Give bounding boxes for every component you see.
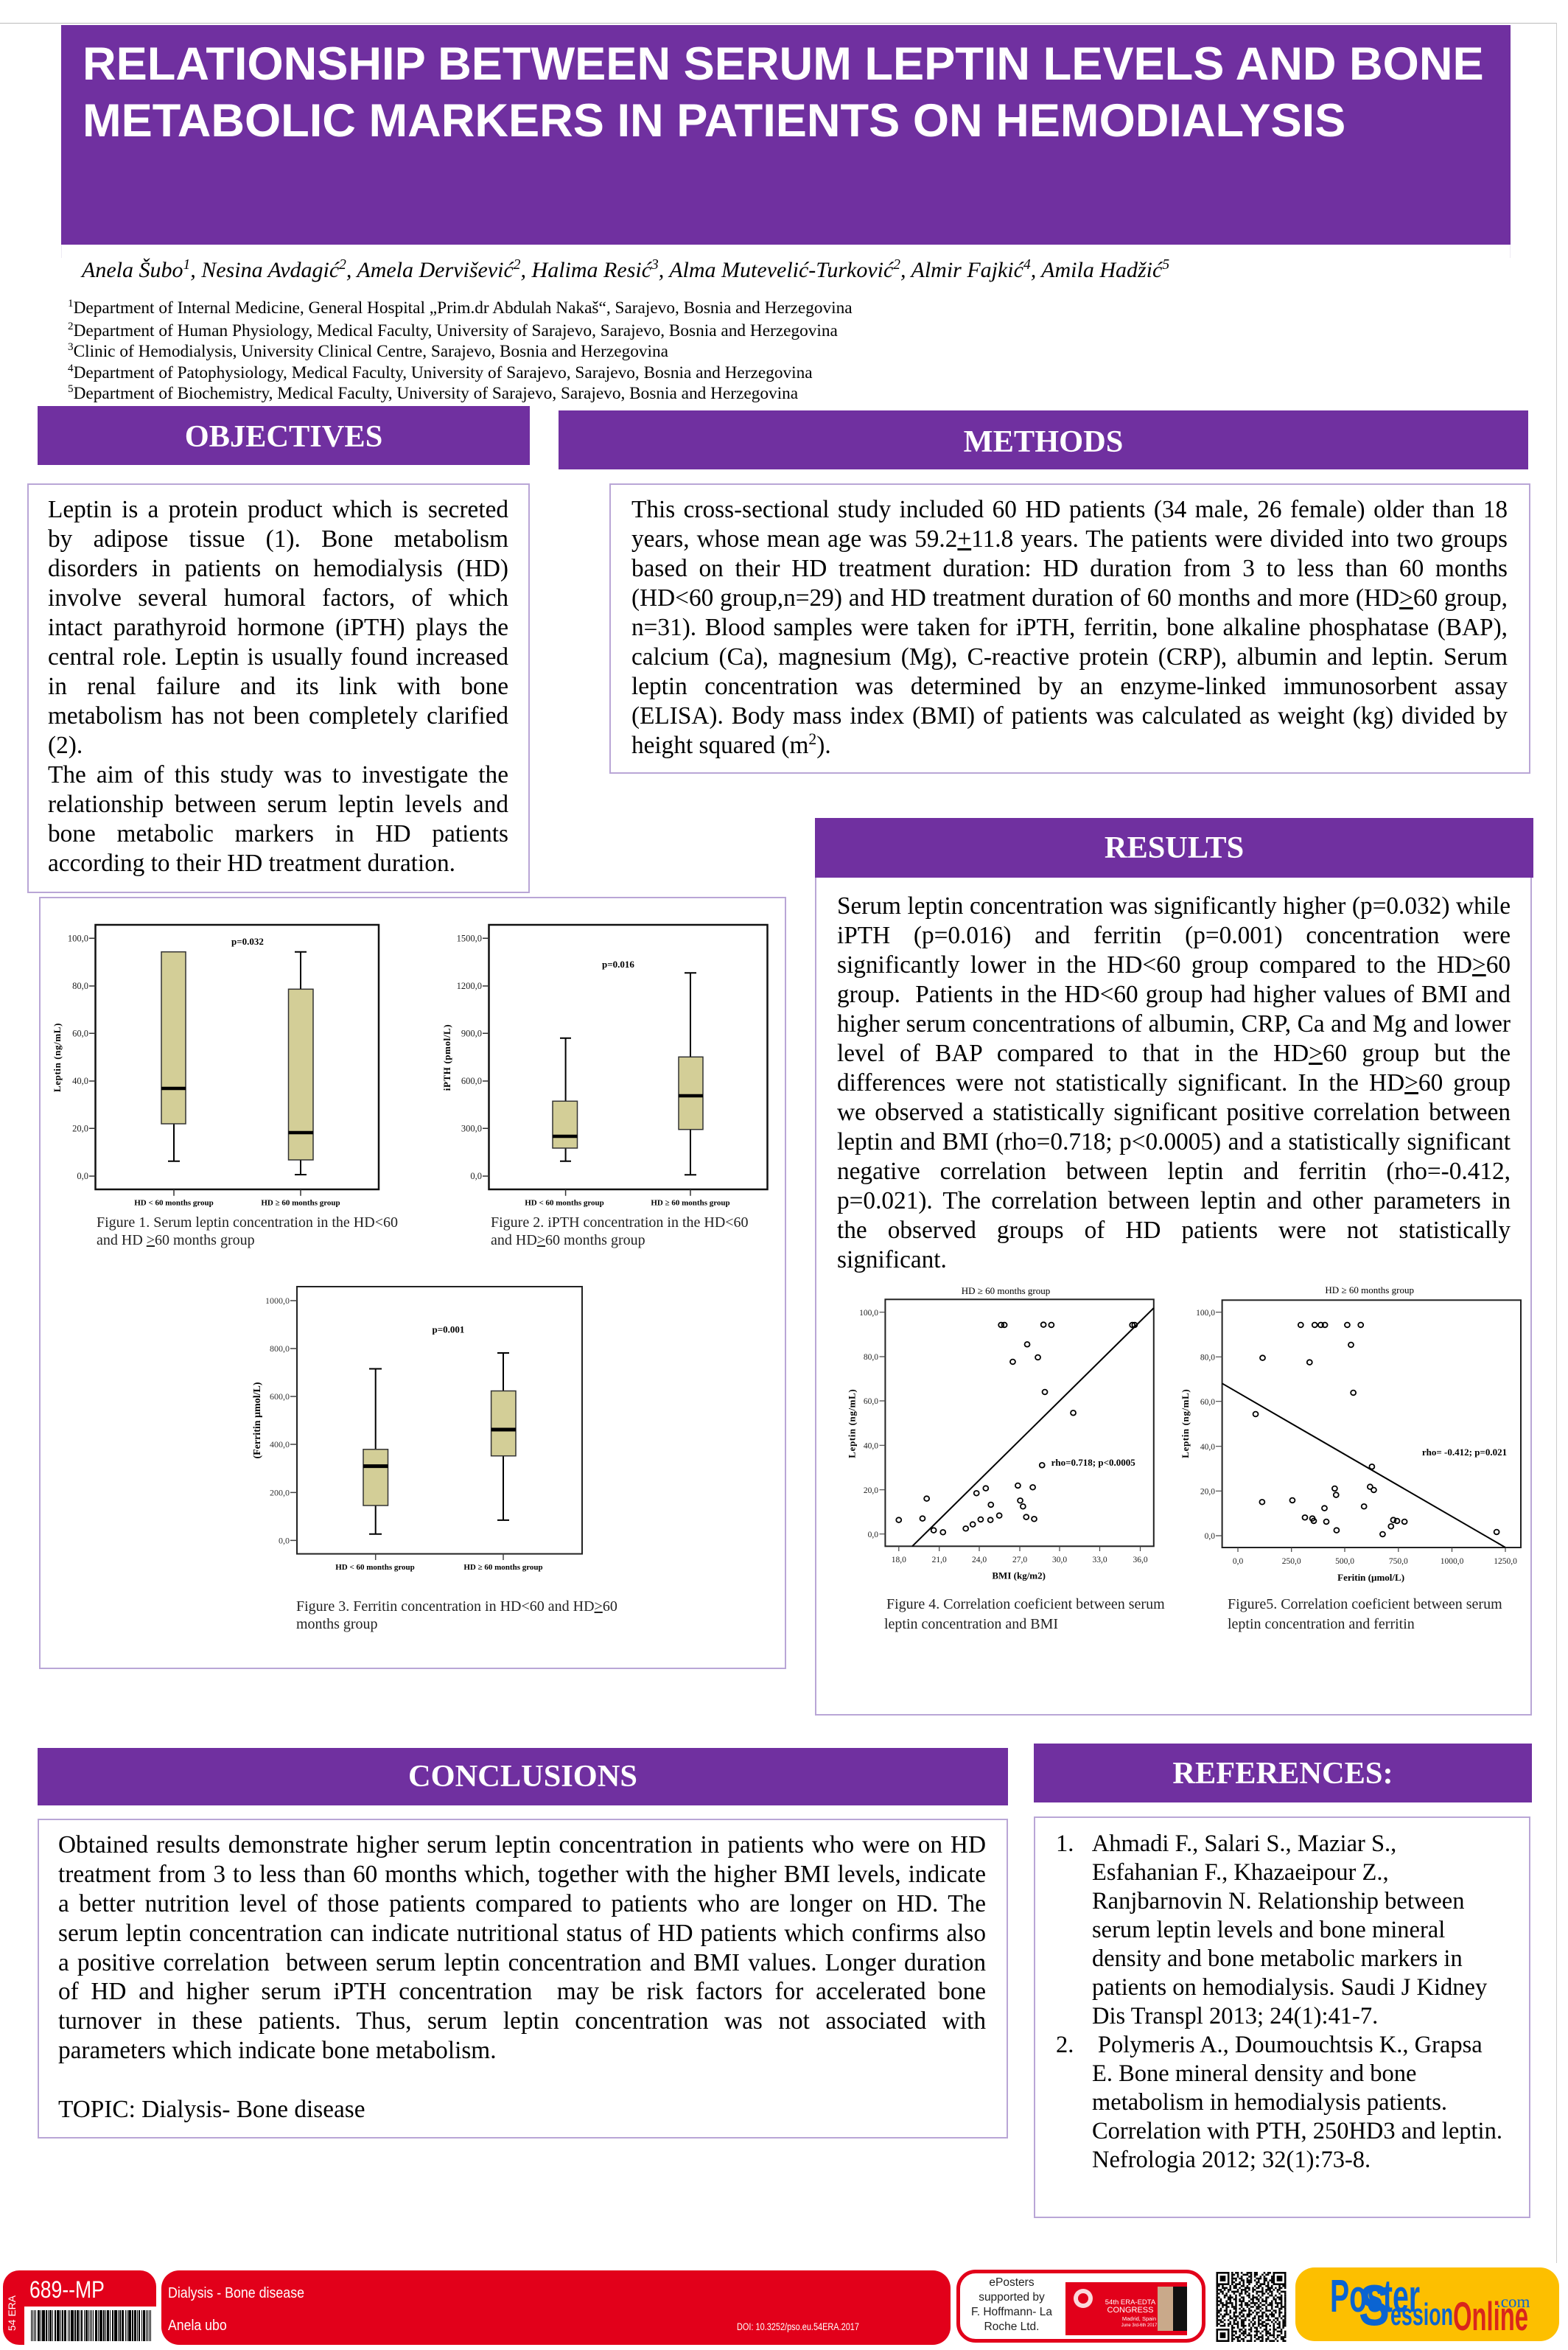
figure 1 boxplot: leptin: 40,0 [72, 1076, 88, 1086]
figure 3 boxplot: ferritin: 1000,0 [265, 1295, 290, 1306]
figure 3 boxplot: ferritin: (Ferritin µmol/L) [252, 1382, 263, 1459]
figure 4 caption: Figure 4. Correlation coeficient between serum [886, 1596, 1165, 1612]
panel: methods [609, 483, 1530, 774]
figure 4 caption: leptin concentration and BMI [884, 1616, 1058, 1632]
poster number: 689--MP [29, 2276, 105, 2303]
affiliations: 4Department of Patophysiology, Medical Faculty, University of Sarajevo, Sarajevo, Bosnia and Herzegovina [68, 363, 813, 382]
figure 3 boxplot: ferritin: 0,0 [279, 1535, 290, 1545]
objectives text: intact parathyroid hormone (iPTH) plays the [48, 614, 508, 641]
figure 5 caption: leptin concentration and ferritin [1228, 1616, 1415, 1632]
figure 4 scatter: leptin vs BMI: 0,0 [868, 1531, 878, 1539]
figure 1 boxplot: leptin: HD < 60 months group [134, 1198, 214, 1207]
figure 2 boxplot: iPTH: iPTH (pmol/L) [441, 1024, 452, 1091]
figure 4 scatter: leptin vs BMI: 100,0 [859, 1309, 878, 1318]
footer: eposter sponsor box [956, 2270, 1205, 2343]
references list: 2. Polymeris A., Doumouchtsis K., Grapsa [1056, 2032, 1483, 2058]
results text: significantly lower in the HD<60 group compared to the HD>60 [837, 951, 1511, 979]
heading: results: RESULTS [1105, 830, 1244, 865]
results text: group. Patients in the HD<60 group had higher values of BMI and [837, 981, 1511, 1008]
figure 5 scatter: leptin vs ferritin: 20,0 [1200, 1487, 1215, 1496]
figure 3 boxplot: ferritin: p=0.001 [433, 1323, 464, 1335]
methods text: n=31). Blood samples were taken for iPTH, ferritin, bone alkaline phosphatase (BAP), [631, 614, 1508, 641]
results text: significant. [837, 1246, 947, 1273]
figure 2 boxplot: iPTH: 0,0 [470, 1171, 482, 1181]
objectives text: by adipose tissue (1). Bone metabolism [48, 525, 508, 553]
figure 5 scatter: leptin vs ferritin: rho= -0.412; p=0.021 [1422, 1447, 1507, 1458]
heading: references [1034, 1744, 1532, 1802]
figure 4 scatter: leptin vs BMI: 18,0 [892, 1556, 906, 1564]
results text: level of BAP compared to that in the HD>60 group but the [837, 1040, 1511, 1067]
conclusions text [58, 1831, 986, 2123]
conclusions text: serum leptin concentration can indicate nutritional status of HD patients which confirms also [58, 1920, 986, 1947]
results text: iPTH (p=0.016) and ferritin (p=0.001) concentration were [837, 922, 1511, 949]
figure 2 boxplot: iPTH [441, 925, 768, 1207]
results text: leptin and BMI (rho=0.718; p<0.0005) and a statistically significant [837, 1128, 1511, 1155]
methods text [631, 496, 1508, 759]
page frame line [0, 23, 1556, 24]
figure 3 boxplot: ferritin: 600,0 [270, 1391, 290, 1402]
title: RELATIONSHIP BETWEEN SERUM LEPTIN LEVELS AND BONE [83, 38, 1484, 90]
congress tag: 54 ERA [6, 2295, 18, 2331]
references list: 1. Ahmadi F., Salari S., Maziar S., [1056, 1830, 1396, 1857]
title banner [61, 25, 1511, 245]
figure 1 boxplot: leptin: Leptin (ng/mL) [52, 1023, 63, 1092]
figure 3 boxplot: ferritin: HD < 60 months group [335, 1563, 415, 1572]
objectives text: involve several humoral factors, of which [48, 584, 508, 612]
sponsor text: ePosters [989, 2276, 1035, 2289]
congress logo [1065, 2282, 1187, 2335]
references list: Ranjbarnovin N. Relationship between [1092, 1888, 1464, 1914]
figure 3 boxplot: ferritin [252, 1287, 582, 1572]
results text [837, 892, 1511, 1273]
methods text: This cross-sectional study included 60 HD patients (34 male, 26 female) older than 18 [631, 496, 1508, 523]
figure 2 boxplot: iPTH: 1500,0 [457, 933, 482, 943]
figure 5 scatter: leptin vs ferritin: 750,0 [1389, 1557, 1408, 1566]
figure 2 boxplot: iPTH: 1200,0 [457, 981, 482, 991]
references list [1056, 1830, 1502, 2173]
panel: results [815, 818, 1532, 1716]
figure 2 caption: >60 months group [537, 1232, 645, 1248]
figure 1 boxplot: leptin: 60,0 [72, 1029, 88, 1039]
figure 3 caption: Figure 3. Ferritin concentration in HD<60 and HD>60 [296, 1598, 617, 1615]
figure 2 boxplot: iPTH: p=0.016 [602, 959, 634, 970]
figure 1 boxplot: leptin: 20,0 [72, 1123, 88, 1133]
congress logo: June 3rd-6th 2017 [1121, 2323, 1158, 2328]
objectives text: (2). [48, 732, 83, 759]
heading: methods [559, 410, 1528, 469]
figure 4 scatter: leptin vs BMI: HD ≥ 60 months group [962, 1285, 1050, 1296]
figure 5 scatter: leptin vs ferritin: 1250,0 [1494, 1557, 1517, 1566]
references list: patients on hemodialysis. Saudi J Kidney [1092, 1974, 1487, 2001]
sponsor text: F. Hoffmann- La [971, 2306, 1052, 2318]
figure 4 scatter: leptin vs BMI: 36,0 [1133, 1556, 1148, 1564]
figure 4 scatter: leptin vs BMI: 80,0 [864, 1353, 878, 1362]
figure 4 scatter: leptin vs BMI [846, 1285, 1154, 1581]
figure 5 caption: Figure5. Correlation coeficient between serum [1228, 1596, 1502, 1612]
panel: references [1034, 1816, 1530, 2218]
objectives text: The aim of this study was to investigate the [48, 761, 508, 788]
methods text: leptin concentration was determined by an enzyme-linked immunosorbent assay [631, 673, 1508, 700]
footer: topic and author bar [161, 2270, 951, 2345]
conclusions text: a positive correlation between serum leptin concentration and BMI values. Longer duration [58, 1949, 986, 1976]
affiliations [68, 298, 853, 403]
sponsor text: supported by [979, 2291, 1045, 2304]
figure 5 scatter: leptin vs ferritin: 1000,0 [1441, 1557, 1464, 1566]
figure 1 boxplot: leptin: p=0.032 [231, 936, 264, 947]
figure 5 scatter: leptin vs ferritin: Leptin (ng/mL) [1180, 1389, 1191, 1458]
methods text: (HD<60 group,n=29) and HD treatment duration of 60 months and more (HD>60 group, [631, 584, 1508, 612]
figure 1 caption: and HD [97, 1232, 147, 1248]
heading: results [815, 818, 1533, 878]
figure 1 caption: >60 months group [147, 1232, 255, 1248]
figure 4 scatter: leptin vs BMI: rho=0.718; p<0.0005 [1051, 1457, 1135, 1468]
figure 5 scatter: leptin vs ferritin: 40,0 [1200, 1443, 1215, 1452]
affiliations: 3Clinic of Hemodialysis, University Clinical Centre, Sarajevo, Bosnia and Herzegovina [68, 341, 668, 361]
affiliations: 1Department of Internal Medicine, General Hospital „Prim.dr Abdulah Nakaš“, Sarajevo, Bosnia and Herzegovina [68, 298, 853, 318]
results text: differences were not statistically significant. In the HD>60 group [837, 1069, 1511, 1097]
figure 4 scatter: leptin vs BMI: 20,0 [864, 1486, 878, 1495]
results text: we observed a statistically significant positive correlation between [837, 1099, 1511, 1126]
objectives text: bone metabolic markers in HD patients [48, 820, 508, 847]
figure 5 scatter: leptin vs ferritin [1180, 1284, 1521, 1583]
author: Anela ubo [168, 2318, 227, 2334]
figure 2 caption: Figure 2. iPTH concentration in the HD<60 [491, 1214, 749, 1231]
figure 1 boxplot: leptin: 80,0 [72, 981, 88, 991]
figure 2 boxplot: iPTH: HD < 60 months group [525, 1198, 604, 1207]
conclusions text: a better nutrition level of those patients compared to patients who are longer on HD. The [58, 1890, 986, 1917]
barcode [24, 2307, 156, 2345]
conclusions text: of HD and higher serum iPTH concentration may be risk factors for accelerated bone [58, 1978, 986, 2005]
figure 5 scatter: leptin vs ferritin: 80,0 [1200, 1353, 1215, 1362]
figure 2 boxplot: iPTH: 300,0 [461, 1123, 482, 1133]
conclusions text: treatment from 3 to less than 60 months which, together with the higher BMI levels, indicate [58, 1861, 986, 1888]
objectives text: central role. Leptin is usually found increased [48, 643, 508, 671]
title [83, 38, 1484, 147]
figure 1 boxplot: leptin [52, 925, 379, 1207]
objectives text: Leptin is a protein product which is secreted [48, 496, 508, 523]
heading: references: REFERENCES: [1172, 1756, 1393, 1791]
figure 1 boxplot: leptin: HD ≥ 60 months group [261, 1198, 340, 1207]
figure 4 scatter: leptin vs BMI: 21,0 [932, 1556, 947, 1564]
references list: serum leptin levels and bone mineral [1092, 1917, 1445, 1943]
objectives text: relationship between serum leptin levels and [48, 791, 508, 818]
figure 3 boxplot: ferritin: HD ≥ 60 months group [463, 1563, 543, 1572]
heading: objectives: OBJECTIVES [185, 419, 382, 454]
objectives text: in renal failure and its link with bone [48, 673, 508, 700]
objectives text: disorders in patients on hemodialysis (HD) [48, 555, 508, 582]
figure 1 boxplot: leptin: 100,0 [68, 933, 88, 943]
methods text: based on their HD treatment duration: HD duration from 3 to less than 60 months [631, 555, 1508, 582]
results text: higher serum concentrations of albumin, CRP, Ca and Mg and lower [837, 1010, 1511, 1038]
figure 5 scatter: leptin vs ferritin: 500,0 [1335, 1557, 1354, 1566]
references list: E. Bone mineral density and bone [1092, 2060, 1416, 2087]
figure 5 scatter: leptin vs ferritin: 250,0 [1282, 1557, 1301, 1566]
methods text: years, whose mean age was 59.2+11.8 years. The patients were divided into two groups [631, 525, 1508, 553]
affiliations: 5Department of Biochemistry, Medical Faculty, University of Sarajevo, Sarajevo, Bosnia and Herzegovina [68, 383, 798, 403]
references list: Correlation with PTH, 250HD3 and leptin. [1092, 2118, 1502, 2144]
results text: the observed groups of HD patients were not statistically [837, 1217, 1511, 1244]
figure 1 boxplot: leptin: 0,0 [77, 1171, 88, 1181]
title: METABOLIC MARKERS IN PATIENTS ON HEMODIALYSIS [83, 95, 1345, 147]
congress logo: CONGRESS [1107, 2306, 1153, 2315]
figure 3 boxplot: ferritin: 200,0 [270, 1487, 290, 1497]
figure 4 scatter: leptin vs BMI: 40,0 [864, 1441, 878, 1450]
figure 4 scatter: leptin vs BMI: BMI (kg/m2) [992, 1570, 1046, 1581]
figure 5 scatter: leptin vs ferritin: 100,0 [1196, 1309, 1215, 1318]
figure 3 caption: months group [296, 1616, 378, 1632]
heading: conclusions [38, 1748, 1008, 1805]
footer: postersessiononline logo: S [1359, 2273, 1390, 2337]
figure 1 caption: Figure 1. Serum leptin concentration in the HD<60 [97, 1214, 398, 1231]
conclusions text: turnover in these patients. Thus, serum leptin concentration was not associated with [58, 2007, 986, 2035]
references list: density and bone metabolic markers in [1092, 1945, 1463, 1972]
footer: postersessiononline logo [1295, 2267, 1559, 2341]
references list: Esfahanian F., Khazaeipour Z., [1092, 1859, 1389, 1886]
references list: metabolism in hemodialysis patients. [1092, 2089, 1447, 2116]
methods text: calcium (Ca), magnesium (Mg), C-reactive protein (CRP), albumin and leptin. Serum [631, 643, 1508, 671]
figure 3 boxplot: ferritin: 400,0 [270, 1439, 290, 1449]
figure 4 scatter: leptin vs BMI: 33,0 [1092, 1556, 1107, 1564]
topic: Dialysis - Bone disease [168, 2285, 304, 2301]
sponsor text: Roche Ltd. [984, 2321, 1039, 2333]
authors: Anela Šubo1, Nesina Avdagić2, Amela Dervišević2, Halima Resić3, Alma Mutevelić-Turković2, Almir Fajkić4, Amila Hadžić5 [82, 257, 1169, 282]
affiliations: 2Department of Human Physiology, Medical Faculty, University of Sarajevo, Sarajevo, Bosnia and Herzegovina [68, 321, 838, 340]
figure 4 scatter: leptin vs BMI: 24,0 [972, 1556, 987, 1564]
panel: conclusions [38, 1819, 1008, 2139]
objectives text: metabolism has not been completely clarified [48, 702, 508, 730]
panel: objectives [27, 483, 530, 893]
heading: objectives [38, 406, 530, 465]
footer: postersessiononline logo: Poster [1330, 2271, 1420, 2322]
figure 5 scatter: leptin vs ferritin: HD ≥ 60 months group [1325, 1284, 1414, 1295]
figure 2 boxplot: iPTH: HD ≥ 60 months group [651, 1198, 730, 1207]
figure 5 scatter: leptin vs ferritin: Feritin (µmol/L) [1337, 1572, 1404, 1583]
figure 5 scatter: leptin vs ferritin: 0,0 [1233, 1557, 1243, 1566]
figure 2 boxplot: iPTH: 900,0 [461, 1029, 482, 1039]
figure 5 scatter: leptin vs ferritin: 60,0 [1200, 1398, 1215, 1407]
results text: negative correlation between leptin and ferritin (rho=-0.412, [837, 1158, 1511, 1185]
figure 5 scatter: leptin vs ferritin: 0,0 [1205, 1532, 1215, 1541]
figure 3 boxplot: ferritin: 800,0 [270, 1343, 290, 1354]
methods text: (ELISA). Body mass index (BMI) of patients was calculated as weight (kg) divided by [631, 702, 1508, 730]
congress logo: 54th ERA-EDTA [1105, 2298, 1156, 2307]
doi: DOI: 10.3252/pso.eu.54ERA.2017 [737, 2321, 859, 2332]
footer: poster id block [3, 2270, 156, 2345]
heading: conclusions: CONCLUSIONS [408, 1759, 637, 1794]
objectives text: according to their HD treatment duration. [48, 850, 455, 877]
references list: Nefrologia 2012; 32(1):73-8. [1092, 2147, 1371, 2173]
conclusions text: TOPIC: Dialysis- Bone disease [58, 2096, 365, 2123]
footer: postersessiononline logo: ession [1390, 2297, 1453, 2332]
congress logo: Madrid, Spain [1122, 2315, 1156, 2322]
results text: p=0.021). The correlation between leptin and other parameters in [837, 1187, 1511, 1214]
figure 4 scatter: leptin vs BMI: 27,0 [1012, 1556, 1027, 1564]
sponsor text [971, 2276, 1052, 2333]
figure 4 scatter: leptin vs BMI: Leptin (ng/mL) [846, 1389, 858, 1458]
conclusions text: parameters which indicate bone metabolism. [58, 2037, 497, 2064]
conclusions text: Obtained results demonstrate higher serum leptin concentration in patients who were on HD [58, 1831, 986, 1858]
figure 2 boxplot: iPTH: 600,0 [461, 1076, 482, 1086]
objectives text [48, 496, 508, 877]
footer: postersessiononline logo: .com [1497, 2293, 1530, 2311]
figure 4 scatter: leptin vs BMI: 30,0 [1052, 1556, 1067, 1564]
figure 4 scatter: leptin vs BMI: 60,0 [864, 1397, 878, 1406]
figure 2 caption: and HD [491, 1232, 537, 1248]
heading: methods: METHODS [964, 424, 1123, 459]
footer: qr code [1216, 2272, 1287, 2342]
results text: Serum leptin concentration was significantly higher (p=0.032) while [837, 892, 1511, 920]
methods text: height squared (m2). [631, 730, 831, 759]
references list: Dis Transpl 2013; 24(1):41-7. [1092, 2003, 1378, 2029]
panel: figures 1-3 [39, 897, 786, 1669]
